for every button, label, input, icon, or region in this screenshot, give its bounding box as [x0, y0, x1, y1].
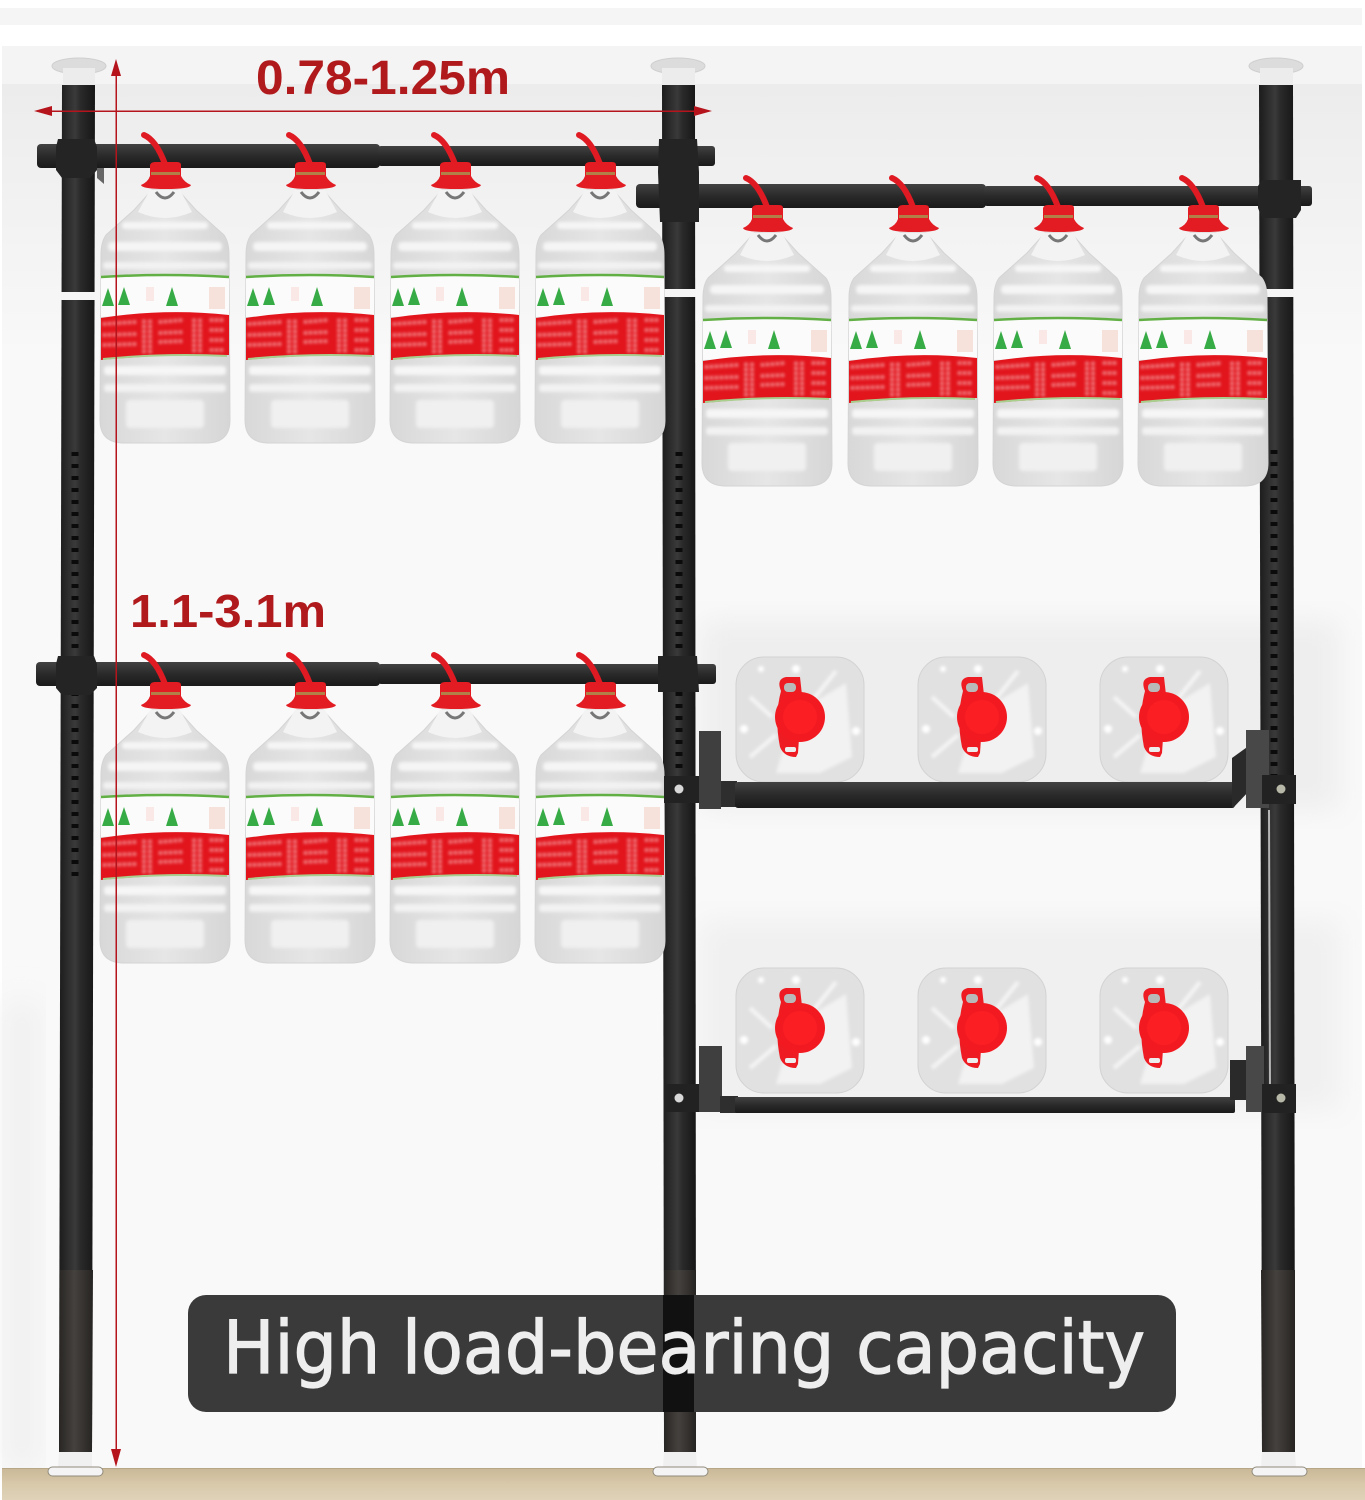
hanging bottles: top left row: [100, 135, 665, 443]
width dimension arrow: [34, 106, 712, 116]
height label: 1.1-3.1m: [130, 585, 326, 637]
caption banner: [188, 1295, 1176, 1412]
bottle 10: [245, 655, 375, 963]
caption text: High load-bearing capacity: [223, 1306, 1145, 1391]
height dimension arrow: [111, 59, 121, 1467]
upper shelf: [664, 730, 1296, 809]
square bottles on upper shelf: [736, 657, 1228, 782]
upper right hanging rail: [636, 139, 1312, 222]
bottle 11: [390, 655, 520, 963]
lower left hanging rail: [36, 656, 716, 695]
square bottle 1: [736, 657, 864, 782]
bottle 9: [100, 655, 230, 963]
square bottle 3: [1100, 657, 1228, 782]
bottle 3: [390, 135, 520, 443]
hanging bottles: top right row: [702, 178, 1268, 486]
bottle 5: [702, 178, 832, 486]
square bottle 2: [918, 657, 1046, 782]
bottle 1: [100, 135, 230, 443]
bottle 4: [535, 135, 665, 443]
width label: 0.78-1.25m: [256, 52, 510, 105]
square bottles on lower shelf: [736, 968, 1228, 1093]
floor: [2, 1468, 1365, 1500]
square bottle 5: [918, 968, 1046, 1093]
upper left hanging rail: [37, 139, 715, 184]
left post: [48, 58, 106, 1476]
bottle 6: [848, 178, 978, 486]
bottle 7: [993, 178, 1123, 486]
middle post: [651, 58, 708, 1476]
right post: [1249, 58, 1307, 1476]
hanging bottles: lower left row: [100, 655, 665, 963]
square bottle 6: [1100, 968, 1228, 1093]
bottle 2: [245, 135, 375, 443]
bottle 12: [535, 655, 665, 963]
bottle 8: [1138, 178, 1268, 486]
lower shelf: [664, 1046, 1296, 1113]
middle post double clamp: [658, 139, 699, 222]
square bottle 4: [736, 968, 864, 1093]
